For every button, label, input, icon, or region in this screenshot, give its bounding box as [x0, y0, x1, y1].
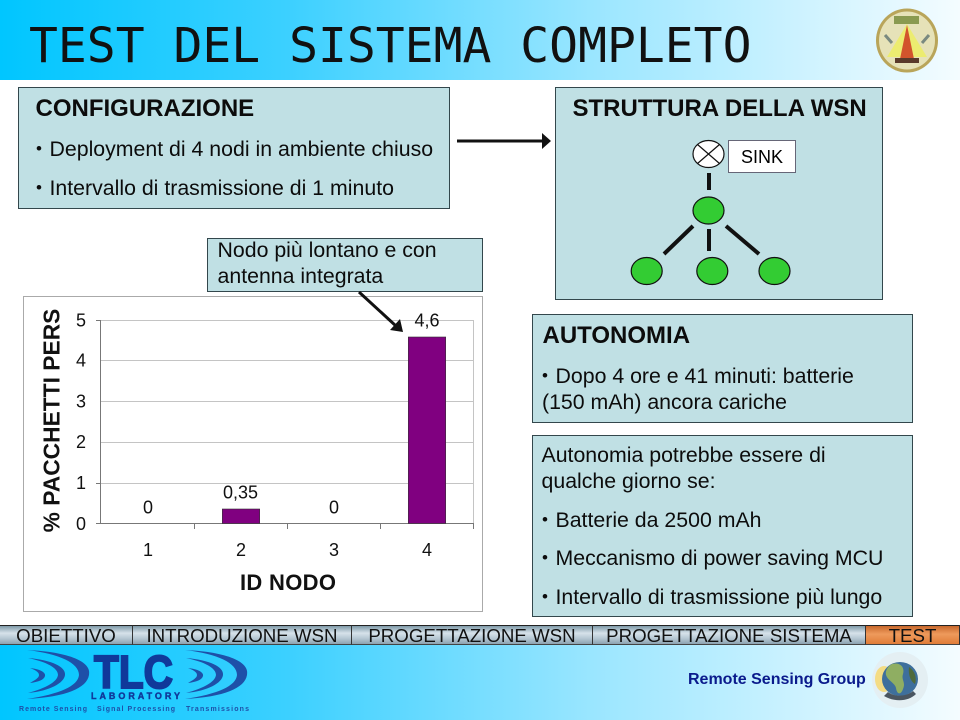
logo: tlc laboratory: Signal Processing: [97, 706, 175, 713]
bars: [222, 337, 446, 524]
data labels: [143, 310, 440, 518]
y axis labels: 5: [76, 310, 86, 330]
header band: [0, 0, 960, 80]
panel: struttura della wsn: [555, 87, 883, 300]
text: INTRODUZIONE WSN: [146, 625, 338, 646]
label: remote sensing group: Remote Sensing Group: [688, 671, 866, 688]
intro text: [542, 443, 826, 493]
icon: globe: [872, 652, 928, 708]
data labels: 0: [143, 498, 153, 518]
text: OBIETTIVO: [16, 625, 116, 646]
bullet: meccanismo: Meccanismo di power saving MCU: [556, 546, 883, 570]
heading: configurazione: CONFIGURAZIONE: [36, 95, 254, 122]
bullet: intervallo: Intervallo di trasmissione più lungo: [556, 584, 882, 608]
panel: configurazione: [18, 87, 450, 209]
y axis labels: 2: [76, 432, 86, 452]
bullet: dopo 4 ore: (150 mAh) ancora cariche: [542, 390, 787, 414]
text: PROGETTAZIONE WSN: [368, 625, 576, 646]
bullet: dopo 4 ore: Dopo 4 ore e 41 minuti: batterie: [556, 364, 854, 388]
data labels: 0: [329, 498, 339, 518]
x axis labels: 2: [236, 540, 246, 560]
x axis title: ID NODO: [240, 570, 336, 595]
title: TEST DEL SISTEMA COMPLETO: [29, 18, 751, 74]
sensor nodes: [631, 197, 790, 284]
bullet: dopo 4 ore: •: [542, 366, 548, 385]
y axis labels: 1: [76, 473, 86, 493]
icon: university seal: [876, 8, 938, 72]
bar chart: [23, 296, 483, 612]
heading: autonomia: AUTONOMIA: [542, 322, 690, 349]
text: PROGETTAZIONE SISTEMA: [606, 625, 852, 646]
bullet: meccanismo: •: [542, 548, 548, 566]
logo: tlc laboratory: LABORATORY: [91, 691, 180, 701]
logo: tlc laboratory: TLC: [94, 646, 173, 698]
data labels: 4,6: [414, 310, 440, 330]
arrow: callout to bar 4: [358, 290, 403, 332]
panel: autonomia potrebbe: [532, 435, 913, 617]
x axis labels: [143, 540, 432, 560]
y axis labels: 3: [76, 392, 86, 412]
bullet: intervallo: •: [36, 178, 42, 197]
bullet: deployment: •: [36, 139, 42, 158]
bullet: deployment: Deployment di 4 nodi in ambiente chiuso: [50, 137, 433, 161]
x axis labels: 3: [329, 540, 339, 560]
callout: nodo piu lontano: antenna integrata: [218, 264, 383, 288]
y axis title: % PACCHETTI PERS: [38, 309, 64, 532]
bullet: intervallo: •: [542, 586, 548, 606]
intro text: qualche giorno se:: [542, 469, 716, 493]
x axis labels: 4: [422, 540, 432, 560]
y axis labels: 0: [76, 514, 86, 534]
callout: nodo piu lontano: [207, 238, 483, 292]
links: [664, 173, 759, 254]
callout: nodo piu lontano: Nodo più lontano e con: [218, 238, 437, 262]
logo: tlc laboratory: Transmissions: [186, 706, 249, 713]
logo: tlc laboratory: [19, 646, 249, 713]
bullet: batterie: •: [542, 510, 548, 528]
heading: struttura della wsn: STRUTTURA DELLA WSN: [572, 95, 867, 122]
text: TEST: [889, 625, 936, 646]
bullet: batterie: Batterie da 2500 mAh: [556, 508, 762, 532]
bullet: intervallo: Intervallo di trasmissione di 1 minuto: [50, 176, 394, 200]
data labels: 0,35: [223, 482, 258, 502]
diagram: wsn tree: [630, 140, 791, 286]
footer band: [0, 645, 960, 720]
label: sink: [728, 140, 796, 173]
panel: autonomia: [532, 314, 913, 423]
bullet: dopo 4 ore: [542, 364, 854, 414]
navigation bar: [0, 625, 960, 646]
y axis labels: 4: [76, 350, 86, 370]
label: sink: SINK: [741, 147, 783, 167]
arrow: configurazione to struttura: [457, 133, 551, 149]
intro text: Autonomia potrebbe essere di: [542, 443, 826, 467]
sink node: [693, 140, 724, 168]
x axis labels: 1: [143, 540, 153, 560]
y axis labels: [76, 310, 86, 534]
logo: tlc laboratory: Remote Sensing: [19, 706, 87, 713]
